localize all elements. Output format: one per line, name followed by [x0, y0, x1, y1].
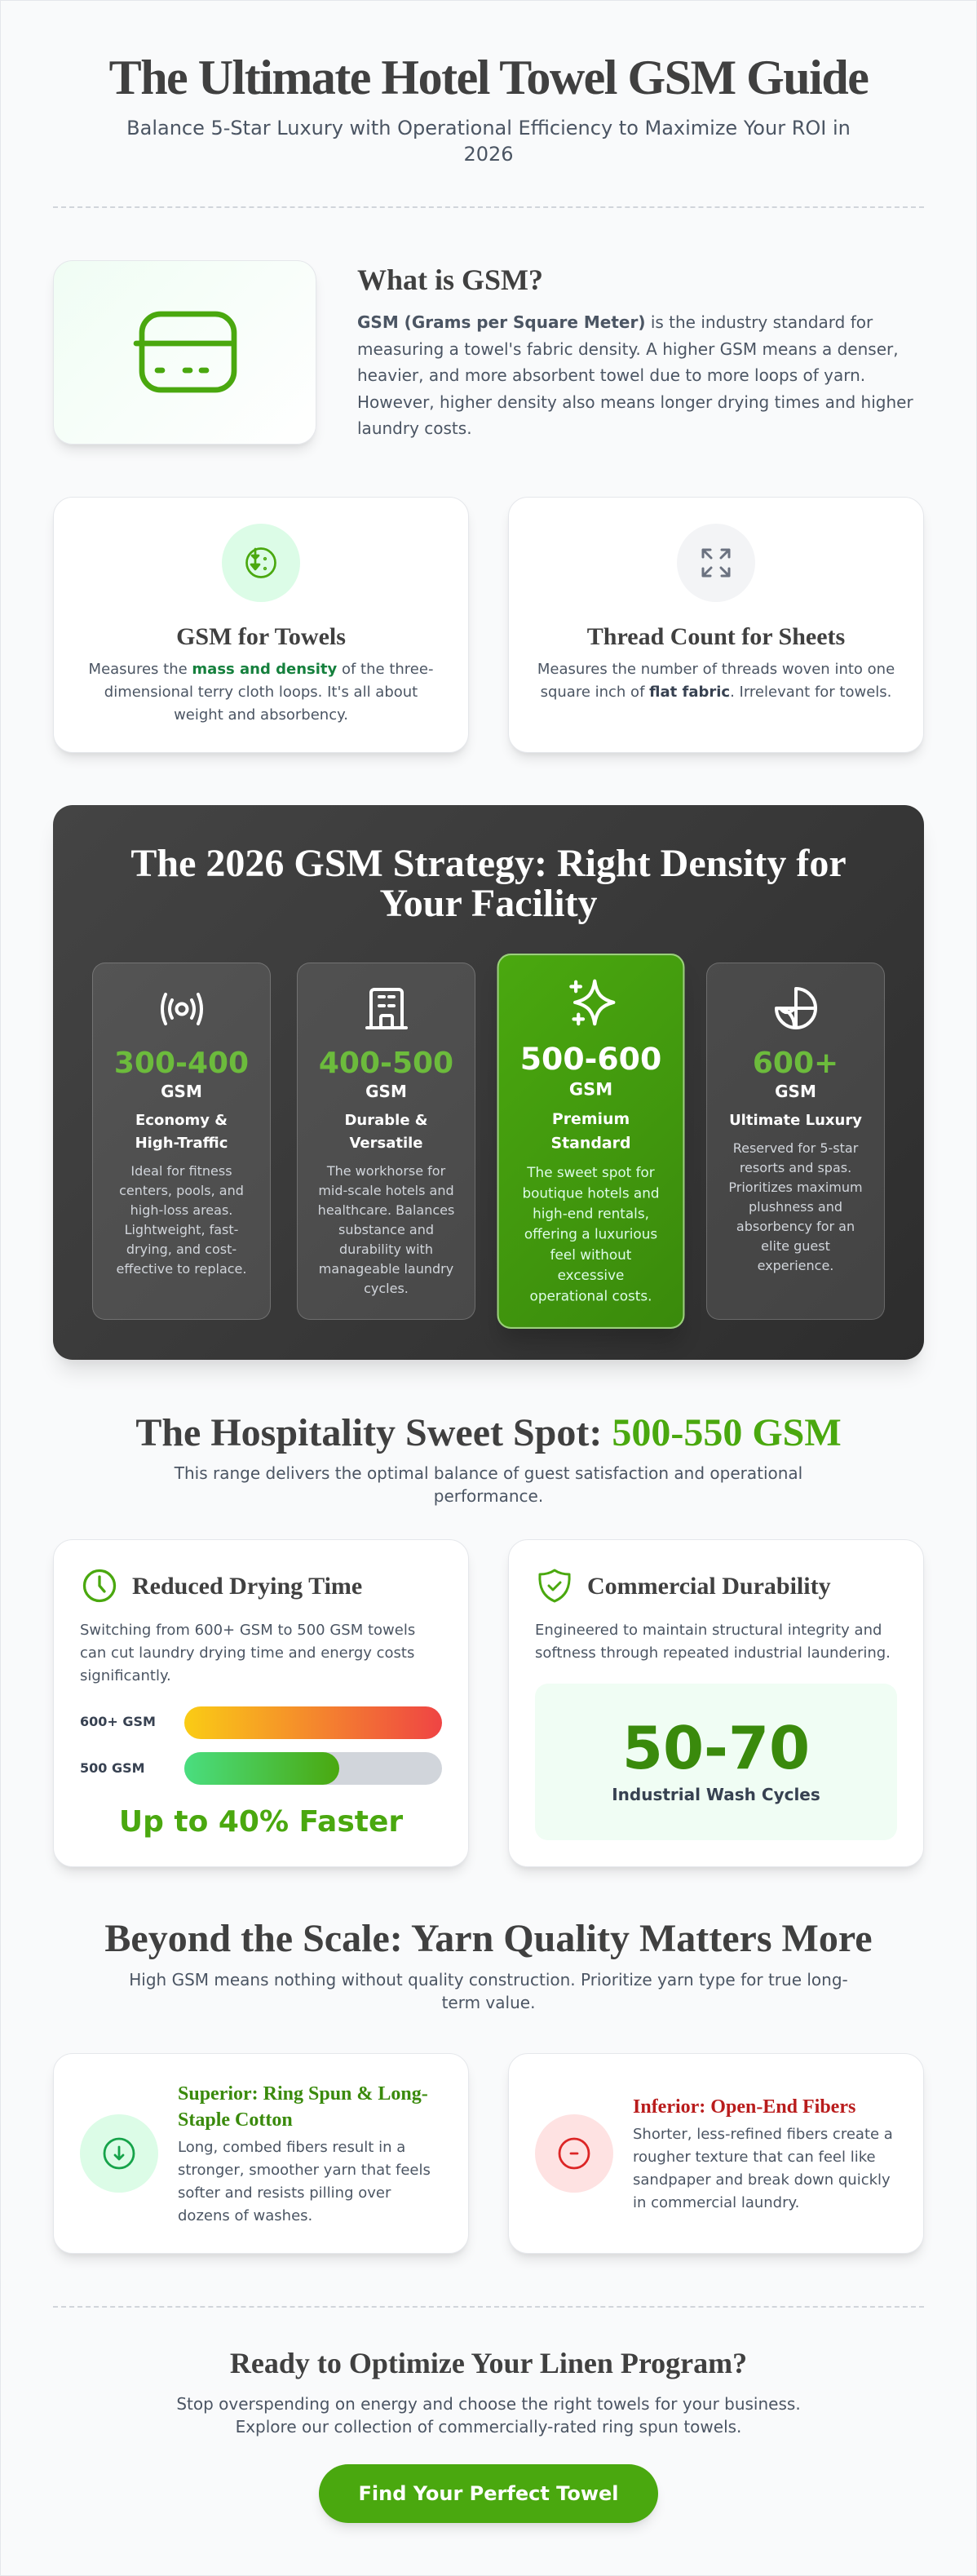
- panel: reduced drying time: [53, 1539, 469, 1867]
- tier: 400-500: [297, 963, 475, 1320]
- tier: 300-400: effective to replace.: [116, 1261, 246, 1277]
- tier: 300-400: Ideal for fitness: [130, 1163, 232, 1179]
- call to action text: Stop overspending on energy and choose the right towels for your business.: [176, 2394, 801, 2414]
- tier: 500-600 highlighted: Standard: [550, 1135, 630, 1153]
- sweet spot subtitle: This range delivers the optimal balance of guest satisfaction and operational: [175, 1463, 802, 1483]
- tier: 600+: plushness and: [749, 1199, 842, 1215]
- tier: 600+: elite guest: [761, 1238, 830, 1254]
- tier: 400-500: Versatile: [349, 1135, 423, 1152]
- heading: Inferior: Open-End Fibers: [633, 2096, 855, 2118]
- sweet spot subtitle: [175, 1463, 802, 1506]
- description: Shorter, less-refined fibers create a: [633, 2126, 893, 2143]
- tier: 600+: [706, 963, 885, 1320]
- tier: 500-600 highlighted: operational costs.: [530, 1288, 652, 1303]
- tier: 500-600 highlighted: high-end rentals,: [533, 1206, 649, 1222]
- bar: 500 with track: [184, 1752, 442, 1785]
- button: find your perfect towel: [319, 2464, 658, 2523]
- description: weight and absorbency.: [174, 706, 348, 724]
- icon: clock: [83, 1569, 116, 1602]
- tier: 300-400: Economy &: [135, 1112, 228, 1129]
- heading: Reduced Drying Time: [132, 1573, 362, 1600]
- description: [535, 1622, 891, 1662]
- description: [80, 1622, 415, 1684]
- panel: GSM for towels: [53, 497, 469, 753]
- tier: 400-500: durability with: [339, 1242, 433, 1257]
- tier: 300-400: Lightweight, fast-: [125, 1222, 238, 1237]
- beyond subtitle: High GSM means nothing without quality construction. Prioritize yarn type for true long-: [129, 1970, 848, 1990]
- heading: The 2026 GSM Strategy: Right Density for: [130, 842, 847, 885]
- stat label: Industrial Wash Cycles: [612, 1785, 820, 1804]
- tier: 500-600 highlighted: feel without: [550, 1246, 631, 1263]
- tier: 300-400: high-loss areas.: [130, 1202, 232, 1218]
- heading: beyond the scale: Beyond the Scale: Yarn Quality Matters More: [104, 1917, 873, 1960]
- tier: 600+: Reserved for 5-star: [733, 1140, 858, 1156]
- button: find your perfect towel: Find Your Perfect Towel: [358, 2482, 618, 2505]
- bar label: 500: 500 GSM: [80, 1760, 145, 1776]
- tier: 400-500: manageable laundry: [319, 1261, 453, 1277]
- heading: hospitality sweet spot: The Hospitality Sweet Spot: 500-550 GSM: [135, 1411, 842, 1454]
- stat value: 50-70: [622, 1714, 810, 1782]
- description: square inch of flat fabric. Irrelevant for towels.: [541, 684, 891, 701]
- tier: 400-500: The workhorse for: [327, 1163, 445, 1179]
- tier: 500-600 highlighted: GSM: [569, 1078, 612, 1100]
- definition text: However, higher density also means longer drying times and higher: [357, 392, 913, 411]
- tier: 500-600 highlighted: excessive: [558, 1267, 624, 1283]
- definition text: heavier, and more absorbent towel due to more loops of yarn.: [357, 365, 865, 385]
- tier: 500-600 highlighted: The sweet spot for: [527, 1164, 655, 1180]
- description: sandpaper and break down quickly: [633, 2171, 891, 2189]
- definition text: laundry costs.: [357, 418, 472, 438]
- description: rougher texture that can feel like: [633, 2149, 876, 2166]
- heading: Commercial Durability: [587, 1573, 831, 1600]
- panel: thread count for sheets: [508, 497, 924, 753]
- description: Measures the mass and density of the three-: [89, 661, 433, 678]
- icon: leaf pie: [775, 987, 817, 1029]
- tier: 400-500: 400-500: [319, 1047, 453, 1080]
- subtitle: 2026: [463, 143, 514, 166]
- tier: 500-600 highlighted: [497, 954, 684, 1329]
- definition text: measuring a towel's fabric density. A higher GSM means a denser,: [357, 339, 899, 359]
- icon: shield: [538, 1569, 571, 1602]
- tier: 400-500: GSM: [365, 1082, 407, 1101]
- tier: 500-600 highlighted: boutique hotels and: [522, 1185, 660, 1201]
- panel: superior yarn: [53, 2053, 469, 2254]
- description: Measures the number of threads woven into one: [537, 661, 895, 678]
- beyond subtitle: term value.: [442, 1993, 535, 2012]
- bar: 600+: [184, 1706, 442, 1739]
- tier: 400-500: Durable &: [344, 1112, 427, 1129]
- icon: density gauge: [222, 524, 300, 602]
- tier: 600+: absorbency for an: [736, 1219, 855, 1234]
- heading: GSM for Towels: [176, 623, 346, 650]
- icon: down circle: [80, 2114, 158, 2193]
- heading: Staple Cotton: [178, 2109, 293, 2131]
- tier: 400-500: cycles.: [364, 1281, 409, 1296]
- definition text: [357, 312, 913, 438]
- tier: 300-400: centers, pools, and: [119, 1183, 244, 1198]
- tier: 300-400: High-Traffic: [135, 1135, 228, 1152]
- description: [633, 2126, 893, 2211]
- stat box: wash cycles: [535, 1684, 897, 1840]
- description: in commercial laundry.: [633, 2194, 799, 2211]
- heading: Your Facility: [379, 882, 598, 925]
- heading: Superior: Ring Spun & Long-: [178, 2083, 428, 2105]
- description: can cut laundry drying time and energy costs: [80, 1644, 414, 1662]
- description: stronger, smoother yarn that feels: [178, 2162, 431, 2179]
- tier: 600+: experience.: [758, 1258, 833, 1273]
- description: Engineered to maintain structural integrity and: [535, 1622, 882, 1639]
- subtitle: [126, 117, 851, 166]
- heading: [178, 2083, 428, 2131]
- tier: 300-400: drying, and cost-: [126, 1242, 237, 1257]
- heading: [130, 842, 847, 925]
- tier: 600+: 600+: [753, 1047, 838, 1080]
- panel: inferior yarn: [508, 2053, 924, 2254]
- panel: what is GSM: [52, 260, 913, 453]
- heading: call to action: Ready to Optimize Your Linen Program?: [230, 2347, 747, 2379]
- panel: 2026 GSM strategy: [53, 805, 924, 1360]
- bar chart: drying comparison: [80, 1706, 442, 1785]
- tier: 600+: Ultimate Luxury: [729, 1112, 862, 1129]
- tier: 500-600 highlighted: 500-600: [520, 1042, 661, 1077]
- tier: 400-500: substance and: [338, 1222, 434, 1237]
- tier: 500-600 highlighted: offering a luxurious: [524, 1226, 657, 1242]
- heading: what is GSM: What is GSM?: [357, 263, 543, 296]
- description: [178, 2139, 431, 2224]
- description: softer and resists pilling over: [178, 2184, 391, 2202]
- description: softness through repeated industrial laundering.: [535, 1644, 891, 1662]
- description: Long, combed fibers result in a: [178, 2139, 405, 2156]
- tier: 300-400: [92, 963, 271, 1320]
- tier: 600+: Prioritizes maximum: [728, 1180, 863, 1195]
- bar label: 600+: 600+ GSM: [80, 1714, 156, 1729]
- title: The Ultimate Hotel Towel GSM Guide: [109, 51, 868, 104]
- tier: 300-400: GSM: [161, 1082, 202, 1101]
- description: dimensional terry cloth loops. It's all about: [104, 684, 418, 701]
- tier: 400-500: healthcare. Balances: [318, 1202, 454, 1218]
- call to action text: Explore our collection of commercially-rated ring spun towels.: [236, 2417, 741, 2437]
- description: significantly.: [80, 1667, 171, 1684]
- icon: sparkles: [569, 979, 615, 1026]
- beyond subtitle: [129, 1970, 848, 2012]
- tier: 600+: GSM: [775, 1082, 816, 1101]
- tier: 500-600 highlighted: Premium: [552, 1110, 630, 1128]
- subtitle: Balance 5-Star Luxury with Operational Efficiency to Maximize Your ROI in: [126, 117, 851, 139]
- definition text: GSM (Grams per Square Meter) is the industry standard for: [357, 312, 873, 332]
- description: Switching from 600+ GSM to 500 GSM towels: [80, 1622, 415, 1639]
- icon: minus circle: [535, 2114, 613, 2193]
- panel: commercial durability: [508, 1539, 924, 1867]
- icon card: towel: [53, 260, 316, 445]
- description: [537, 661, 895, 701]
- sweet spot subtitle: performance.: [434, 1486, 543, 1506]
- heading: Thread Count for Sheets: [587, 623, 845, 650]
- icon: expand arrows: [677, 524, 755, 602]
- tier: 400-500: mid-scale hotels and: [318, 1183, 454, 1198]
- callout: 40% faster: Up to 40% Faster: [119, 1805, 403, 1839]
- icon: building: [365, 988, 408, 1029]
- call to action text: [176, 2394, 801, 2437]
- tier: 600+: resorts and spas.: [740, 1160, 851, 1175]
- description: [89, 661, 433, 724]
- tier: 300-400: 300-400: [114, 1047, 249, 1080]
- description: dozens of washes.: [178, 2207, 312, 2224]
- icon: signal: [161, 992, 203, 1026]
